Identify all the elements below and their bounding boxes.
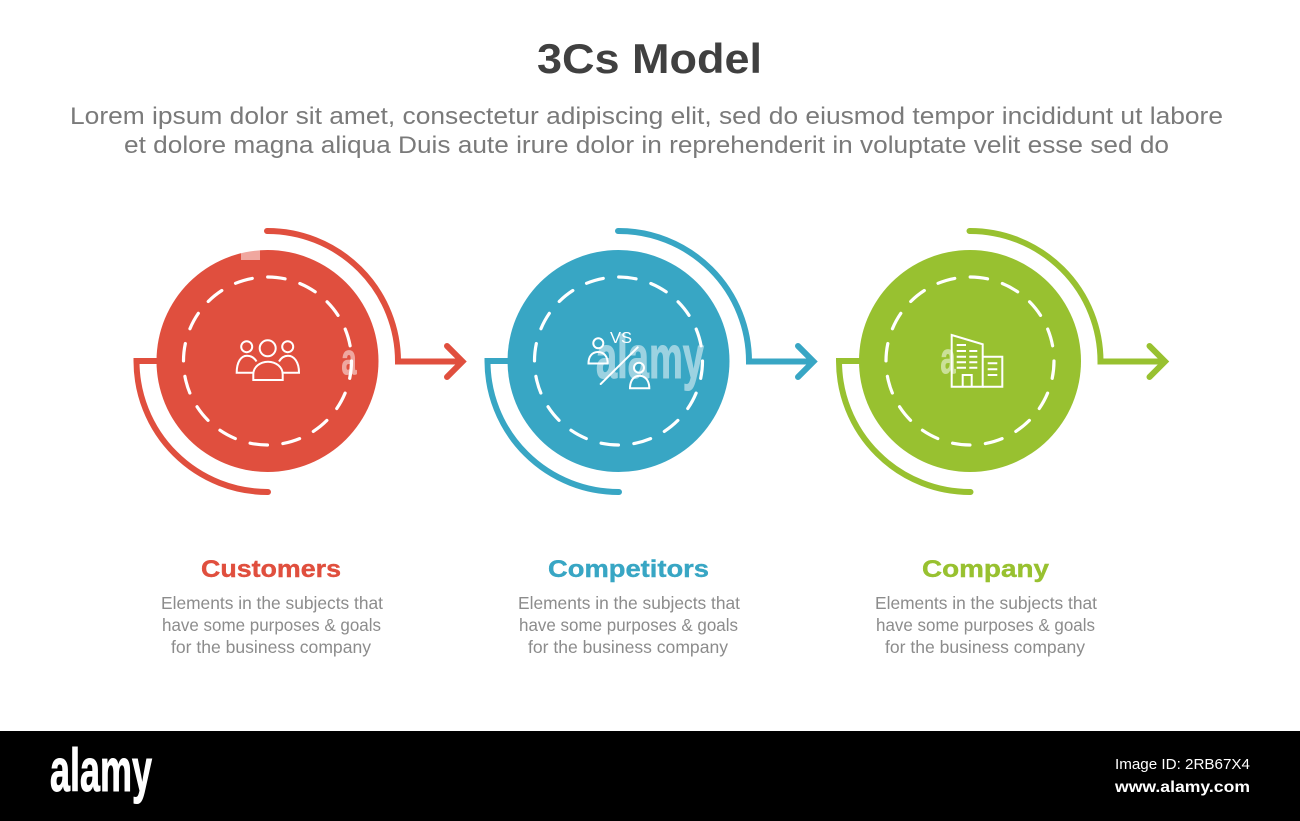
website: www.alamy.com [1114, 779, 1250, 796]
dashed ring: company [886, 277, 1054, 445]
image id: Image ID: 2RB67X4 [1115, 756, 1250, 773]
description: customers [161, 593, 383, 657]
filled circle: customers [156, 250, 378, 472]
text block: company [875, 556, 1097, 657]
filled circle: company [859, 250, 1081, 472]
heading: competitors: Competitors [548, 556, 709, 583]
description: company [875, 593, 1097, 657]
description: competitors: for the business company [528, 637, 728, 657]
description: competitors: have some purposes & goals [519, 615, 738, 635]
panel: customers circle [136, 231, 462, 492]
title: 3Cs Model [537, 35, 762, 82]
intro paragraph [70, 103, 1223, 159]
description: competitors [518, 593, 740, 657]
watermark fragment: top of customers circle [241, 250, 260, 260]
dashed ring: customers [184, 277, 352, 445]
panel: company circle [839, 231, 1165, 492]
icon: office buildings [952, 335, 1002, 387]
watermark fragment: company: a [940, 334, 956, 383]
description: company: for the business company [885, 637, 1085, 657]
outer arc and arrow: competitors [618, 231, 814, 377]
description: customers: for the business company [171, 637, 371, 657]
heading: company: Company [922, 556, 1050, 583]
footer bar [0, 731, 1300, 821]
outer arc and arrow: company [970, 231, 1165, 377]
lower arc: company [839, 361, 970, 492]
watermark fragment: customers: a [342, 335, 357, 384]
intro paragraph: Lorem ipsum dolor sit amet, consectetur adipiscing elit, sed do eiusmod tempor incididunt ut labore [70, 103, 1223, 130]
lower arc: competitors [488, 361, 619, 492]
watermark: alamy over competitors icon: alamy [596, 324, 704, 391]
outer arc and arrow: customers [267, 231, 462, 377]
text block: competitors [518, 556, 740, 657]
dashed ring: competitors [534, 277, 702, 445]
panel: competitors circle [488, 231, 814, 492]
text block: customers [161, 556, 383, 657]
description: competitors: Elements in the subjects that [518, 593, 740, 613]
description: customers: have some purposes & goals [162, 615, 381, 635]
filled circle: competitors [508, 250, 730, 472]
icon: versus people [588, 330, 649, 388]
footer logo: alamy [50, 737, 152, 804]
intro paragraph: et dolore magna aliqua Duis aute irure dolor in reprehenderit in voluptate velit esse sed do [124, 132, 1169, 159]
icon: versus people: VS [610, 330, 632, 347]
icon: people group [237, 340, 299, 380]
heading: customers: Customers [201, 556, 341, 583]
description: company: have some purposes & goals [876, 615, 1095, 635]
lower arc: customers [136, 361, 268, 492]
description: customers: Elements in the subjects that [161, 593, 383, 613]
description: company: Elements in the subjects that [875, 593, 1097, 613]
